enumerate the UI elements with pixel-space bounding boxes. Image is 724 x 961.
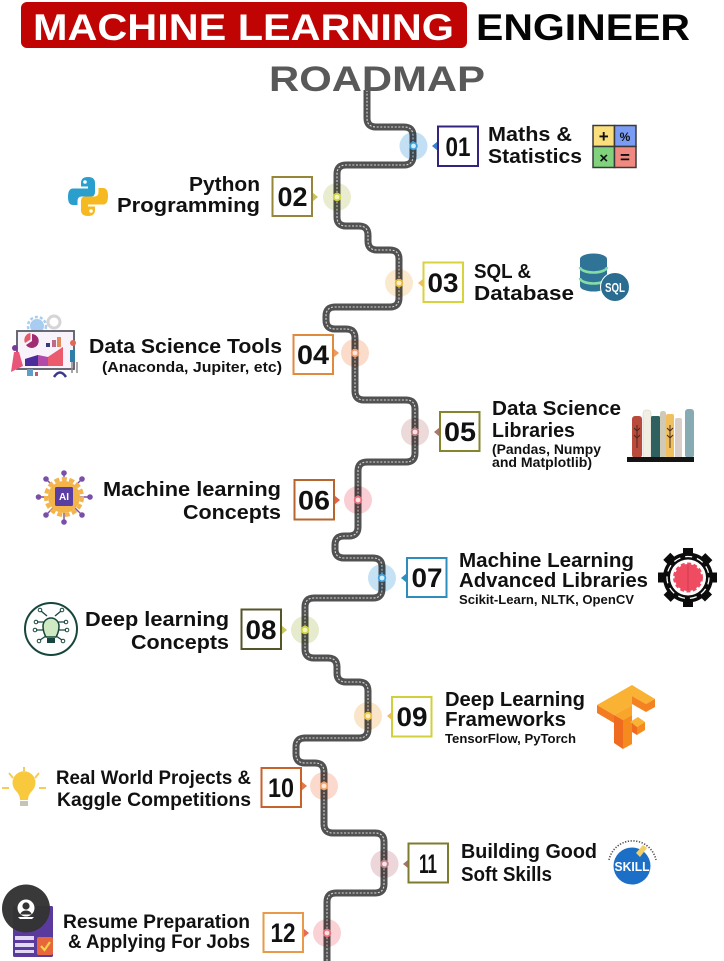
label 09: Frameworks: [445, 708, 566, 731]
icon: database with sql badge: SQL: [605, 280, 625, 295]
icon: ai chip gear: AI: [59, 492, 69, 503]
label 10: Real World Projects &: [56, 768, 251, 789]
label 08: Deep learning: [85, 608, 229, 631]
icon: skill badge: SKILL: [614, 860, 650, 874]
label 01: Maths &: [488, 123, 572, 146]
icon: resume document: [13, 906, 53, 957]
label 12: & Applying For Jobs: [68, 932, 250, 953]
label 07: Scikit-Learn, NLTK, OpenCV: [459, 592, 634, 607]
label 06: Machine learning: [103, 478, 281, 501]
icon: skill badge: [609, 841, 656, 884]
icon: tensorflow logo: [597, 685, 655, 749]
label 03: SQL &: [474, 260, 531, 283]
number box 11: [408, 844, 448, 882]
label 06: Concepts: [183, 501, 281, 524]
node 05: [401, 418, 440, 446]
label 06: [103, 478, 281, 524]
label 03: [474, 260, 574, 305]
number box 11: 11: [419, 849, 437, 879]
icon: ai chip gear: [36, 470, 93, 525]
label 11: [461, 840, 597, 886]
road: [296, 90, 415, 961]
title word: engineer: ENGINEER: [476, 7, 690, 48]
label 05: Libraries: [492, 419, 575, 442]
node 01: [400, 132, 438, 160]
number box 08: 08: [246, 615, 276, 645]
node 11: [370, 850, 409, 878]
label 12: Resume Preparation: [63, 912, 250, 933]
node 03: [385, 269, 424, 297]
label 10: [56, 768, 251, 811]
icon: python logo: [68, 177, 108, 216]
node 09: [354, 702, 393, 730]
icon: data dashboard: [11, 316, 77, 377]
label 05: and Matplotlib): [492, 455, 592, 470]
number box 05: 05: [444, 417, 476, 447]
label 01: Statistics: [488, 145, 582, 168]
number box 02: [272, 177, 312, 216]
number box 09: 09: [396, 702, 428, 732]
node 06: [334, 486, 372, 514]
step 04: data science tools: [11, 316, 369, 377]
label 11: Building Good: [461, 840, 597, 863]
number box 06: [294, 480, 334, 520]
label 04: [89, 335, 282, 376]
label 09: Deep Learning: [445, 688, 585, 711]
label 07: Advanced Libraries: [459, 569, 648, 592]
label 08: Concepts: [131, 631, 229, 654]
label 08: [85, 608, 229, 654]
label 09: [445, 688, 585, 746]
label 07: [459, 549, 648, 607]
label 03: Database: [474, 282, 574, 305]
label 02: Programming: [117, 194, 260, 217]
label 01: [488, 123, 582, 168]
number box 04: [294, 335, 333, 374]
node 10: [301, 772, 338, 800]
title: [21, 2, 690, 48]
label 07: Machine Learning: [459, 549, 634, 572]
number box 08: [242, 610, 281, 649]
icon: calculator: +: [599, 127, 609, 146]
label 05: [492, 397, 621, 470]
icon: light bulb: [2, 767, 46, 806]
icon: gear with brain: [658, 548, 717, 607]
number box 07: [407, 558, 446, 597]
step 09: deep learning frameworks: [354, 685, 655, 749]
step 03: sql and database: [385, 254, 630, 305]
node 08: [281, 616, 319, 644]
step 07: machine learning advanced libraries: [368, 548, 717, 607]
step 10: real world projects: [2, 767, 338, 811]
label 09: TensorFlow, PyTorch: [445, 731, 576, 746]
label 12: [63, 912, 250, 953]
node 07: [368, 564, 407, 592]
number box 07: 07: [412, 563, 442, 593]
number box 10: [262, 768, 301, 807]
label 02: [117, 173, 260, 217]
label 04: Data Science Tools: [89, 335, 282, 358]
step 06: machine learning concepts: [36, 470, 372, 525]
step 08: deep learning concepts: [25, 603, 319, 655]
icon: calculator: [593, 126, 636, 168]
step 01: maths and statistics: [400, 123, 636, 168]
label 05: (Pandas, Numpy: [492, 442, 601, 457]
title word: roadmap: ROADMAP: [269, 60, 485, 99]
icon: calculator: %: [620, 130, 631, 144]
number box 12: 12: [270, 918, 296, 948]
number box 05: [440, 412, 480, 451]
icon: books on shelf: [627, 409, 694, 462]
icon: database with sql badge: [580, 254, 630, 302]
icon: calculator: ×: [599, 150, 608, 167]
label 02: Python: [189, 173, 260, 196]
number box 03: [424, 262, 463, 302]
number box 01: 01: [446, 132, 470, 162]
number box 12: [264, 913, 303, 952]
label 04: (Anaconda, Jupiter, etc): [102, 359, 282, 376]
number box 03: 03: [428, 268, 458, 298]
number box 09: [392, 697, 432, 736]
number box 01: [438, 126, 478, 166]
avatar overlay: [2, 884, 50, 932]
node 02: [312, 183, 351, 211]
label 11: Soft Skills: [461, 863, 552, 886]
number box 10: 10: [268, 773, 294, 803]
step 11: soft skills: [370, 840, 656, 886]
step 12: resume preparation: [2, 884, 341, 957]
node 12: [303, 919, 341, 947]
number box 02: 02: [278, 182, 308, 212]
step 05: data science libraries: [401, 397, 694, 470]
icon: calculator: =: [620, 148, 630, 167]
title badge: machine learning: MACHINE LEARNING: [33, 7, 454, 48]
number box 04: 04: [297, 340, 329, 370]
label 05: Data Science: [492, 397, 621, 420]
step 02: python programming: [68, 173, 351, 217]
label 10: Kaggle Competitions: [57, 790, 251, 811]
number box 06: 06: [298, 486, 330, 516]
icon: deep learning bulb: [25, 603, 77, 655]
node 04: [333, 339, 369, 367]
